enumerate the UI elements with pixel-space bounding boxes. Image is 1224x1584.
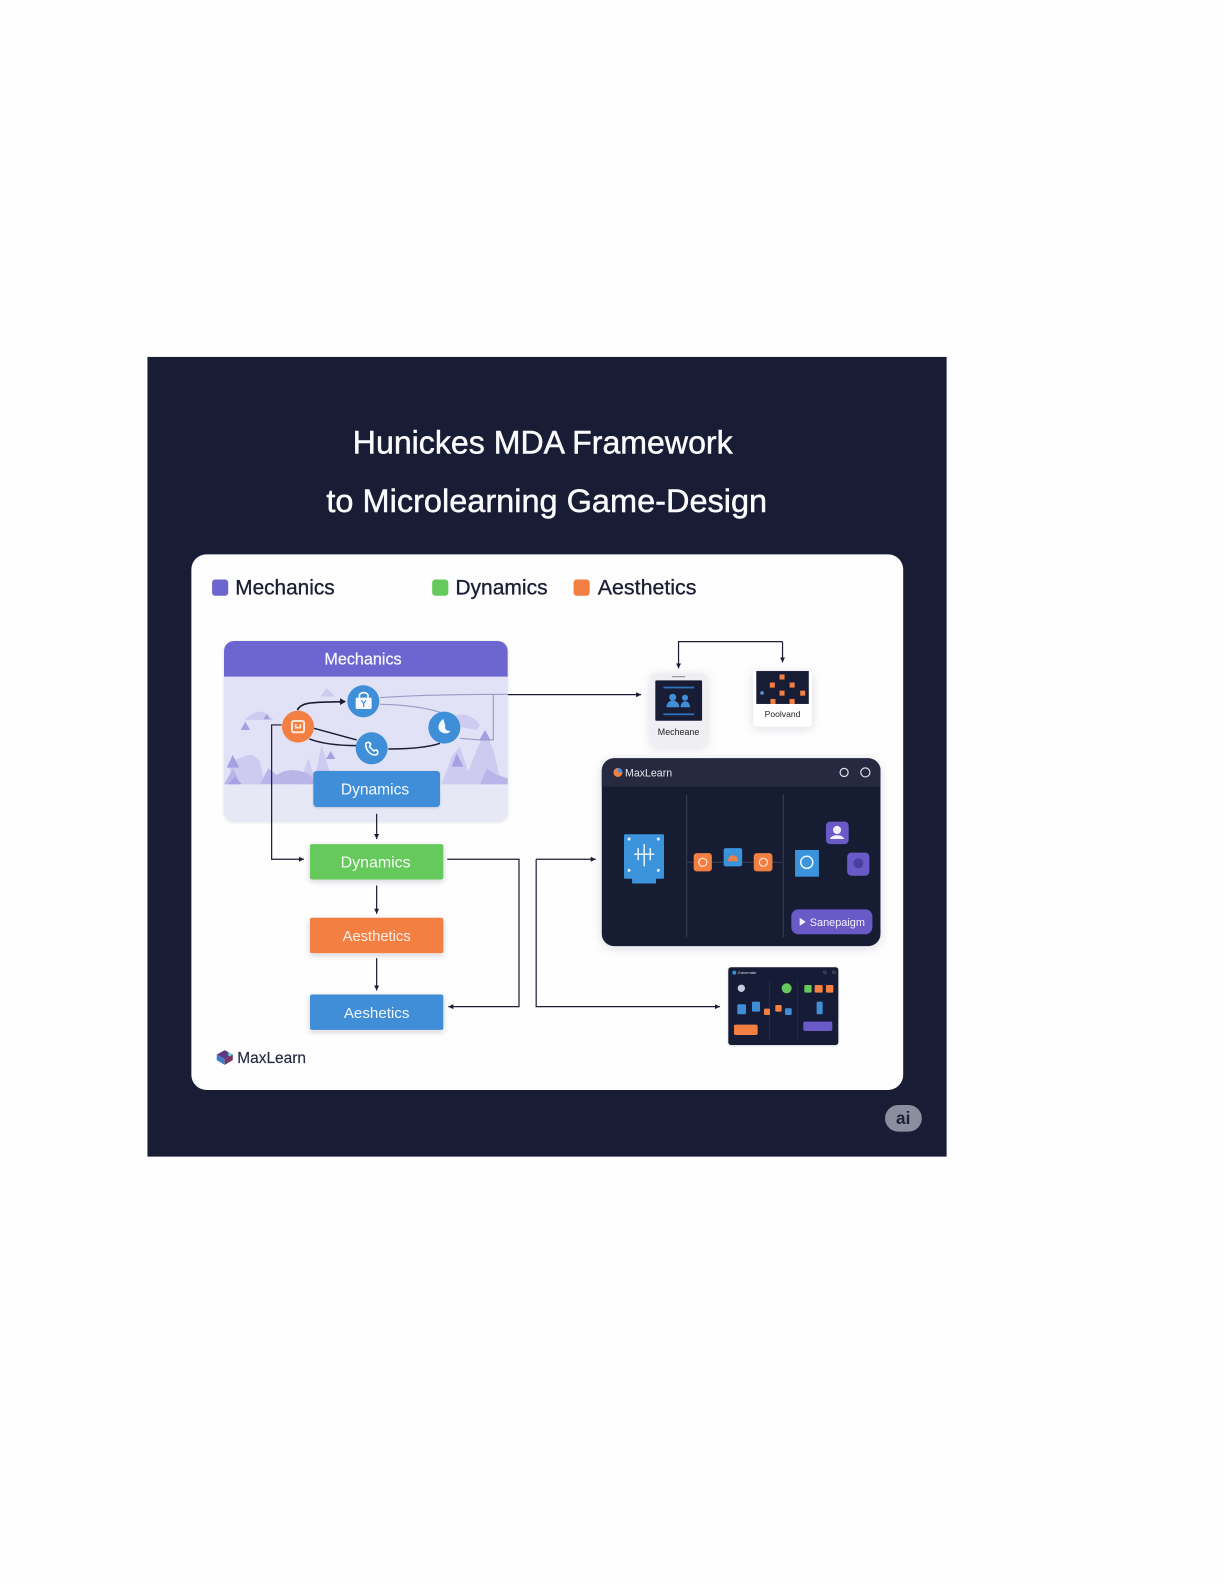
blue board icon — [624, 834, 664, 883]
maxlearn logo: MaxLearn — [237, 1050, 306, 1067]
white card — [191, 554, 903, 1090]
mechanics header: Mechanics — [324, 650, 402, 668]
title — [326, 424, 767, 519]
app window: maxlearn dashboard: MaxLearn — [625, 767, 672, 779]
legend: Aesthetics — [598, 576, 696, 600]
node: phone — [356, 732, 388, 764]
mechanics header — [224, 641, 508, 677]
ai badge: ai — [896, 1108, 910, 1128]
title: Hunickes MDA Framework — [353, 424, 734, 460]
campaign button — [791, 909, 872, 934]
legend: Dynamics — [455, 577, 548, 600]
ai badge — [885, 1105, 922, 1132]
step: aesthetics — [310, 918, 443, 953]
background hills — [230, 688, 508, 784]
node: lock — [347, 685, 379, 717]
node: orange — [282, 711, 314, 743]
dark background panel — [147, 357, 947, 1157]
node: moon — [428, 712, 460, 744]
step: dynamics: Dynamics — [341, 854, 411, 871]
card: poolvand: Poolvand — [765, 709, 801, 719]
mini dashboard: Eavemate — [738, 970, 757, 975]
dynamics button: Dynamics — [341, 781, 409, 798]
step: dynamics — [310, 844, 443, 879]
panel: mechanics — [224, 641, 508, 822]
card: mecheane — [651, 673, 707, 745]
step: aeshetics — [310, 995, 443, 1030]
title: to Microlearning Game-Design — [326, 483, 767, 519]
purple user icons — [826, 822, 869, 876]
app window: maxlearn dashboard — [602, 758, 880, 946]
flow arrows — [272, 642, 783, 1007]
network connections — [297, 694, 508, 749]
card: mecheane: Mecheane — [658, 727, 699, 737]
step: aesthetics: Aesthetics — [343, 929, 411, 945]
dynamics button — [313, 771, 440, 807]
campaign button: Sanepaigm — [810, 917, 865, 929]
mini dashboard — [728, 967, 838, 1045]
arrow tip on network — [340, 698, 346, 705]
legend — [212, 576, 696, 600]
step: aeshetics: Aeshetics — [344, 1005, 410, 1022]
orange and blue nodes — [694, 848, 819, 877]
card: poolvand — [753, 671, 812, 727]
legend: Mechanics — [235, 577, 335, 600]
